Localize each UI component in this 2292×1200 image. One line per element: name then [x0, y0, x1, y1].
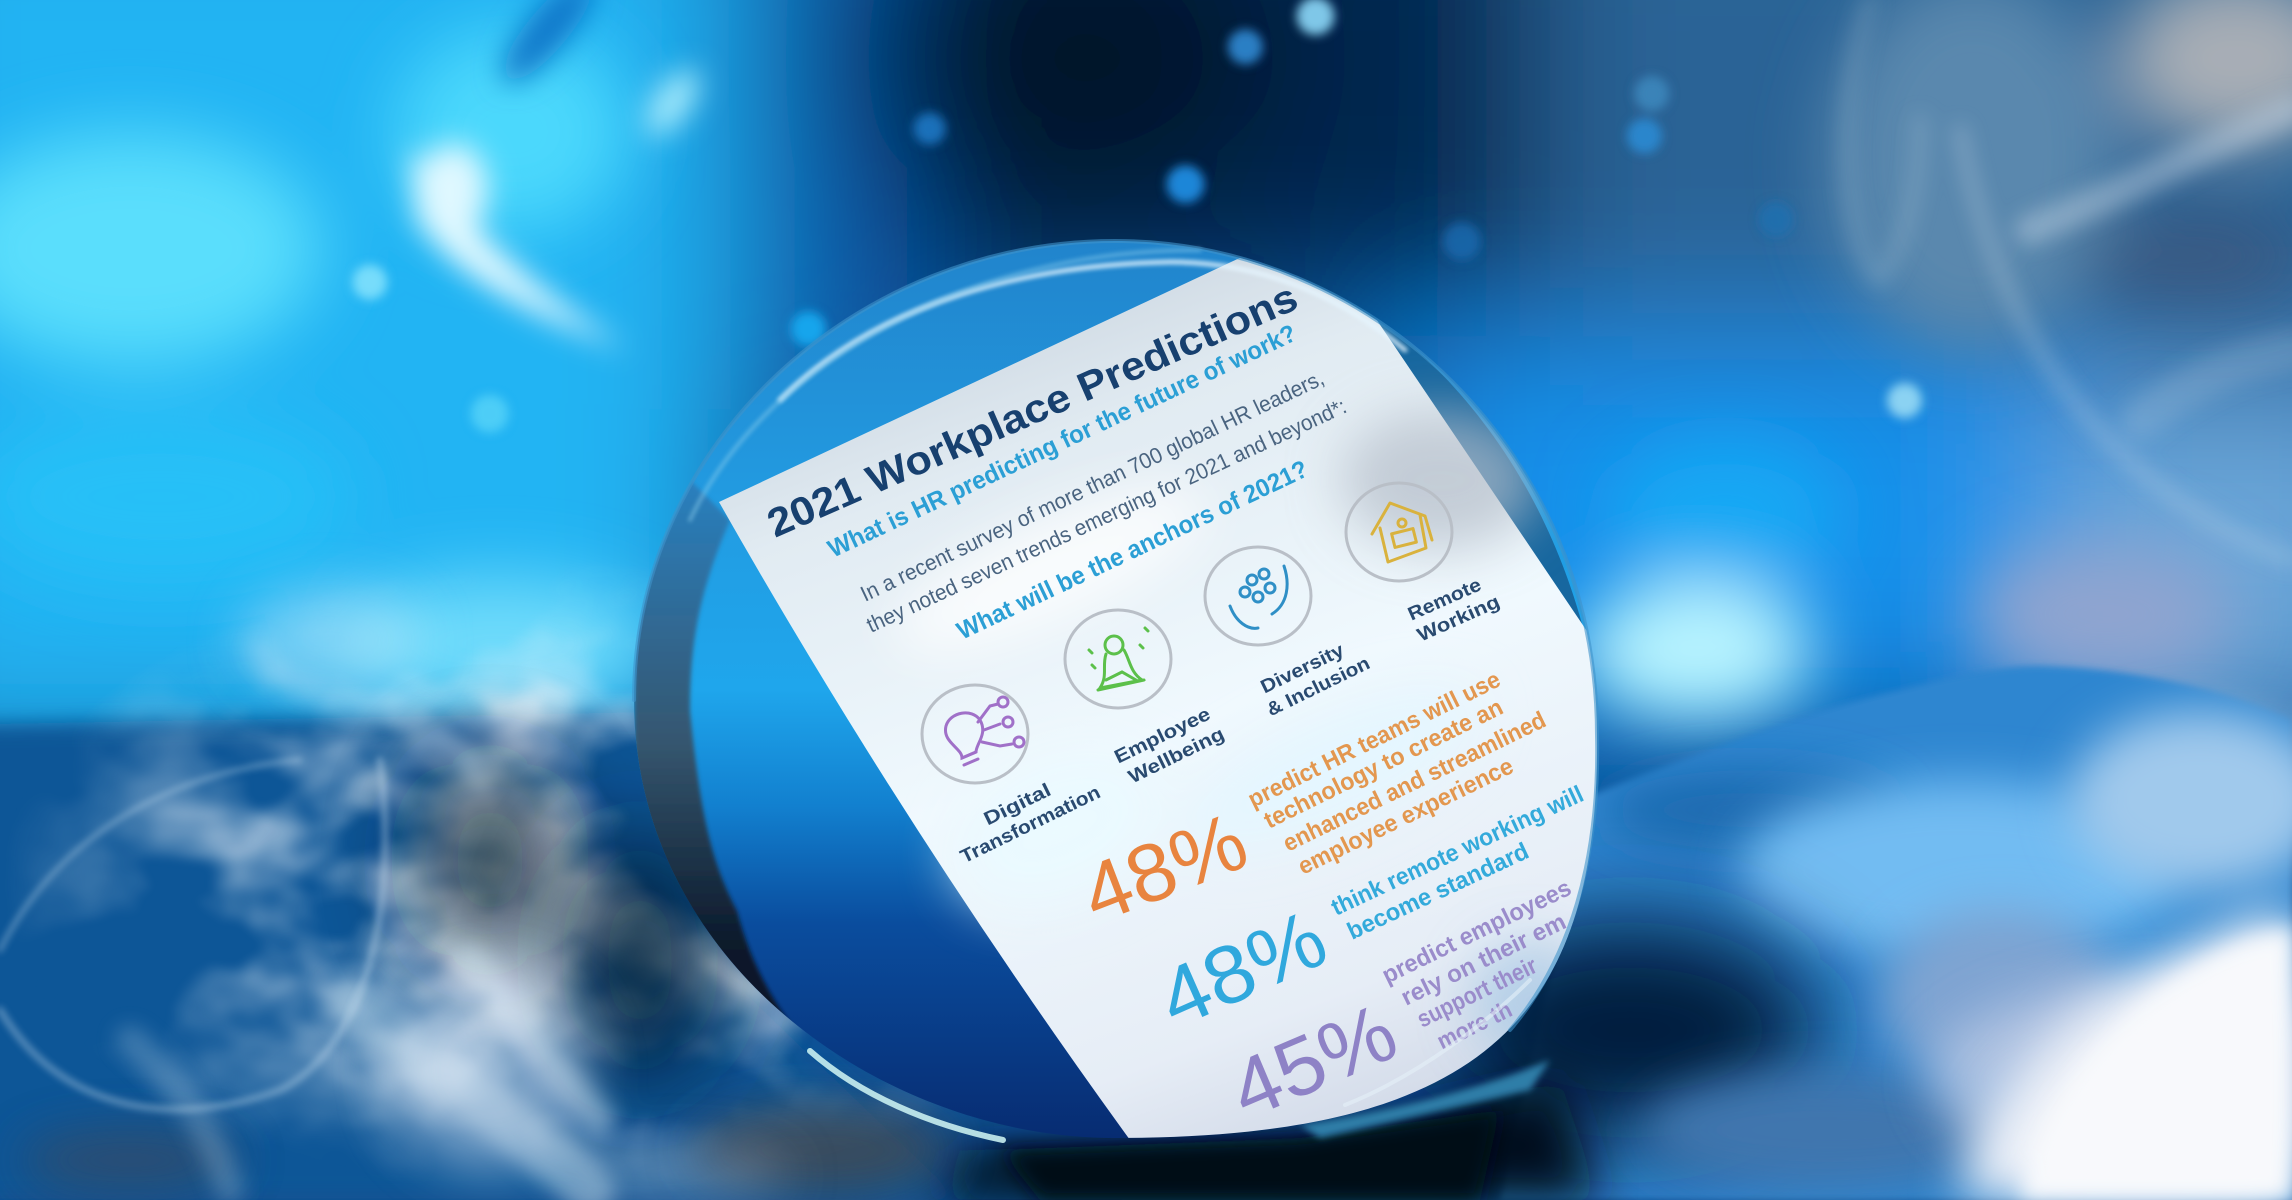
sheet: subheading one: What is HR predicting for the future of work?: [824, 319, 1301, 563]
smoke: bottom-right white glow: [1930, 905, 2292, 1200]
stat: 45 percent employer support: predict employees: [1378, 874, 1576, 989]
sheet: title: 2021 Workplace Predictions: [761, 275, 1304, 546]
sheet: intro line two: they noted seven trends emerging for 2021 and beyond*:: [863, 393, 1350, 638]
icon: employee wellbeing: [1065, 610, 1171, 708]
smoke: turbulent wisps: [22, 622, 932, 1182]
label: Employee Wellbeing: Employee: [1111, 704, 1214, 768]
smoke: bottom-left glow: [240, 590, 790, 1199]
stat: 48 percent remote working: become standard: [1343, 838, 1533, 945]
label: Diversity and Inclusion: [1258, 640, 1374, 721]
stat: 48 percent remote working: think remote working will: [1327, 781, 1588, 921]
stat: 48 percent HR technology: employee experience: [1294, 753, 1518, 880]
ball: left dark rim: [634, 270, 1600, 1140]
background: dark pockets at left: [20, 760, 950, 1195]
stat: 48 percent remote working: [1146, 781, 1588, 1045]
label: Remote Working: [1405, 575, 1503, 646]
label: Diversity and Inclusion: Diversity: [1258, 640, 1348, 698]
stat: 48 percent HR technology: 48%: [1070, 796, 1259, 941]
stat: 48 percent HR technology: predict HR teams will use: [1244, 666, 1505, 813]
sheet: refraction glows: [874, 410, 1590, 1060]
icon: digital transformation: [922, 685, 1028, 783]
stat: 48 percent HR technology: [1070, 666, 1550, 941]
label: Digital Transformation: Digital: [981, 780, 1055, 830]
ball: glass body: [634, 241, 1597, 1138]
stat: 48 percent HR technology: enhanced and streamlined: [1279, 706, 1550, 857]
sheet: paper: [719, 258, 1598, 1138]
stat: 45 percent employer support: more th: [1433, 996, 1517, 1055]
background: floor under the ball: [940, 1060, 1600, 1200]
ball: printed sheet seen through the lens: [719, 258, 1598, 1138]
label: Remote Working: Working: [1414, 591, 1503, 646]
stat: 48 percent HR technology: technology to create an: [1260, 694, 1507, 834]
crystal ball: [632, 239, 1600, 1143]
background: right blue hill: [1440, 666, 2292, 1200]
label: Digital Transformation: Transformation: [957, 782, 1104, 868]
icon: remote working: [1346, 483, 1452, 581]
smoke: left swirl strokes: [0, 650, 600, 1190]
stat: 45 percent employer support: [1217, 874, 1576, 1137]
sheet: subheading two: What will be the anchors of 2021?: [953, 455, 1312, 645]
label: Employee Wellbeing: [1111, 704, 1228, 788]
stat: 45 percent employer support: rely on their em: [1397, 908, 1570, 1011]
background: left hill: [0, 712, 960, 1200]
ball: rim highlights: [634, 241, 1597, 1140]
stat: 45 percent employer support: 45%: [1217, 986, 1410, 1137]
icon: diversity and inclusion: [1205, 547, 1311, 645]
stat: 45 percent employer support: support their: [1413, 952, 1541, 1033]
label: Remote Working: Remote: [1405, 575, 1485, 625]
label: Diversity and Inclusion: & Inclusion: [1264, 653, 1374, 721]
sheet: intro line one: In a recent survey of more than 700 global HR leaders,: [856, 365, 1328, 607]
smoke: upper-right wisps: [1848, 0, 2292, 560]
label: Employee Wellbeing: Wellbeing: [1125, 724, 1228, 788]
stat: 48 percent remote working: 48%: [1146, 893, 1340, 1045]
